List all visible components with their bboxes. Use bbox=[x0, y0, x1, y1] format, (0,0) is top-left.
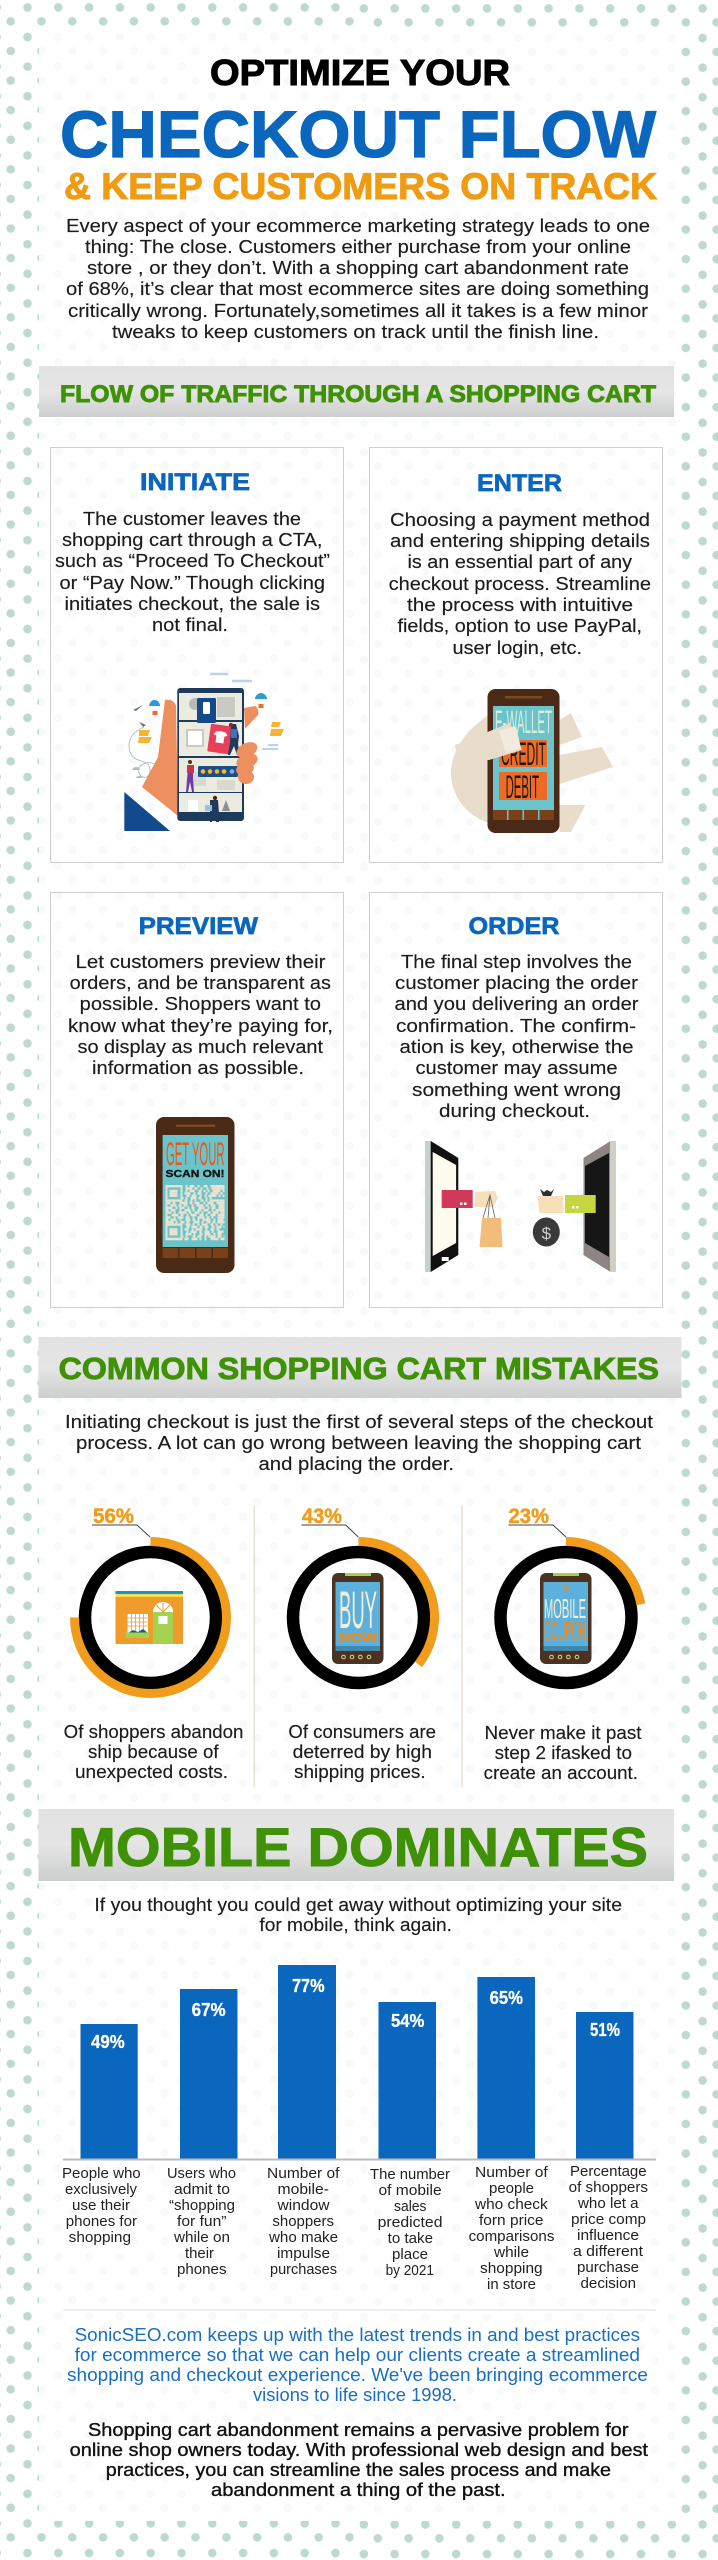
icon: hand holding e-wallet phone: DEBIT bbox=[506, 769, 539, 805]
number: 56%: 56% bbox=[93, 1505, 134, 1528]
text: order description: customer placing the order bbox=[395, 973, 638, 993]
title line: keep customers on track: & KEEP CUSTOMERS ON TRACK bbox=[64, 166, 657, 207]
text: caption 23 percent bbox=[484, 1723, 642, 1783]
chart label: column 1 bbox=[62, 2165, 141, 2246]
chart label: column 2: their bbox=[185, 2245, 214, 2262]
icon: hand holding e-wallet phone bbox=[451, 689, 613, 833]
chart label: column 3: who make bbox=[268, 2229, 338, 2246]
chart label: column 5: while bbox=[493, 2244, 529, 2261]
text: caption 23 percent: Never make it past bbox=[484, 1723, 642, 1743]
chart label: column 6: Percentage bbox=[570, 2163, 647, 2180]
text: closing paragraph: online shop owners today. With professional web design and best bbox=[70, 2440, 648, 2460]
text: order description: and you delivering an order bbox=[394, 994, 638, 1014]
text: order description: confirmation. The confirm- bbox=[396, 1016, 636, 1036]
panel: preview: GET YOUR bbox=[166, 1136, 224, 1172]
chart label: column 4 bbox=[370, 2166, 450, 2279]
text: initiate description: not final. bbox=[152, 615, 228, 635]
chart label: column 3 bbox=[267, 2165, 340, 2278]
number: 43%: 43% bbox=[302, 1505, 342, 1528]
icon: hand holding shopping phone bbox=[124, 674, 284, 831]
text: closing paragraph bbox=[70, 2420, 648, 2500]
chart label: column 6: price comp bbox=[571, 2211, 646, 2228]
text: closing paragraph: practices, you can streamline the sales process and make bbox=[106, 2460, 611, 2480]
chart label: column 5 bbox=[469, 2164, 554, 2293]
chart label: column 1: shopping bbox=[69, 2229, 131, 2246]
text: closing paragraph: Shopping cart abandonment remains a pervasive problem for bbox=[88, 2420, 629, 2440]
stat: 56 percent unexpected costs bbox=[74, 1505, 226, 1694]
text: order description bbox=[394, 952, 638, 1121]
chart label: column 5: comparisons bbox=[469, 2228, 554, 2245]
stat: 43 percent shipping prices: BUY bbox=[339, 1581, 377, 1640]
icon: hand holding e-wallet phone: CREDIT bbox=[501, 736, 546, 772]
intro paragraph: critically wrong. Fortunately,sometimes all it takes is a few minor bbox=[68, 301, 648, 321]
chart label: column 2: for fun” bbox=[177, 2213, 226, 2230]
text: enter description: user login, etc. bbox=[452, 638, 582, 658]
chart label: column 4: to take bbox=[388, 2230, 433, 2247]
label: dollar sign: $ bbox=[562, 1583, 569, 1595]
text: enter description bbox=[389, 510, 651, 658]
text: preview description: so display as much relevant bbox=[78, 1037, 323, 1057]
icon glyph: dollar sign: $ bbox=[542, 1224, 552, 1243]
bar: 65% bbox=[477, 1977, 535, 2159]
text: enter description: Choosing a payment method bbox=[390, 510, 650, 530]
text: preview description: Let customers preview their bbox=[76, 952, 326, 972]
chart label: column 6: purchase bbox=[577, 2259, 639, 2276]
chart label: column 6: who let a bbox=[577, 2195, 639, 2212]
text: initiate description: or “Pay Now.” Though clicking bbox=[60, 573, 325, 593]
chart label: column 6 bbox=[569, 2163, 648, 2292]
stat: 23 percent create an account: COUPON bbox=[544, 1615, 586, 1646]
section banner: common shopping cart mistakes bbox=[38, 1337, 681, 1398]
text: enter description: is an essential part of any bbox=[408, 552, 632, 572]
icon: phone with qr code bbox=[156, 1117, 234, 1273]
text: caption 56 percent bbox=[64, 1722, 243, 1782]
chart label: column 3: shoppers bbox=[272, 2213, 334, 2230]
chart label: column 4: predicted bbox=[378, 2214, 442, 2231]
title line: checkout flow: CHECKOUT FLOW bbox=[60, 98, 656, 171]
text: preview description: possible. Shoppers want to bbox=[80, 994, 321, 1014]
bar: 77%: 77% bbox=[292, 1976, 325, 1996]
bar: 77% bbox=[278, 1965, 336, 2159]
chart label: column 2: while on bbox=[173, 2229, 230, 2246]
icon: buy now phone bbox=[332, 1573, 384, 1664]
bar: 67% bbox=[180, 1989, 238, 2159]
chart label: column 6: of shoppers bbox=[569, 2179, 648, 2196]
text: caption 43 percent bbox=[288, 1722, 436, 1782]
chart label: column 1: use their bbox=[72, 2197, 130, 2214]
chart label: column 5: forn price bbox=[479, 2212, 544, 2229]
text: sonicseo blurb: for ecommerce so that we can help our clients create a streamlined bbox=[75, 2345, 640, 2365]
chart label: column 5: shopping bbox=[480, 2260, 543, 2277]
text: initiate description: The customer leaves the bbox=[83, 509, 301, 529]
bar: 49%: 49% bbox=[91, 2032, 125, 2052]
title line: optimize your: OPTIMIZE YOUR bbox=[210, 52, 510, 93]
text: sonicseo blurb: visions to life since 1998. bbox=[253, 2385, 457, 2405]
chart label: column 2: Users who bbox=[167, 2165, 236, 2182]
text: enter description: fields, option to use PayPal, bbox=[398, 616, 642, 636]
text: preview description: orders, and be transparent as bbox=[70, 973, 331, 993]
chart label: column 4: The number bbox=[370, 2166, 450, 2183]
text: order description: The final step involves the bbox=[401, 952, 632, 972]
text: preview description: know what they’re paying for, bbox=[68, 1016, 333, 1036]
stat: 23 percent create an account: MOBILE bbox=[544, 1593, 586, 1624]
chart label: column 2: phones bbox=[177, 2261, 226, 2278]
section banner: flow of traffic: FLOW OF TRAFFIC THROUGH A SHOPPING CART bbox=[60, 381, 656, 408]
title bbox=[60, 52, 657, 207]
heading: initiate: INITIATE bbox=[140, 469, 250, 496]
chart label: column 3: Number of bbox=[267, 2165, 340, 2182]
chart label: column 3: purchases bbox=[270, 2261, 337, 2278]
heading: preview: PREVIEW bbox=[139, 913, 258, 940]
label: now: NOW bbox=[339, 1632, 377, 1644]
text: mistakes intro bbox=[65, 1412, 653, 1474]
text: preview description bbox=[68, 952, 333, 1078]
stat: 43 percent shipping prices bbox=[293, 1505, 435, 1683]
bar: 51%: 51% bbox=[590, 2020, 620, 2040]
chart label: column 4: place bbox=[392, 2246, 428, 2263]
bar: 67%: 67% bbox=[192, 2000, 226, 2020]
text: caption 43 percent: shipping prices. bbox=[294, 1762, 426, 1782]
text: initiate description: shopping cart through a CTA, bbox=[62, 530, 322, 550]
chart label: column 1: exclusively bbox=[65, 2181, 137, 2198]
text: order description: ation is key, otherwise the bbox=[400, 1037, 634, 1057]
intro paragraph: thing: The close. Customers either purchase from your online bbox=[85, 237, 631, 257]
icon: mobile coupon phone bbox=[540, 1573, 592, 1664]
bar chart bbox=[63, 1965, 656, 2160]
text: mobile intro: for mobile, think again. bbox=[259, 1915, 452, 1935]
text: caption 56 percent: unexpected costs. bbox=[75, 1762, 228, 1782]
chart label: column 3: window bbox=[276, 2197, 330, 2214]
text: mistakes intro: and placing the order. bbox=[258, 1454, 454, 1474]
chart label: column 4: sales bbox=[394, 2198, 426, 2215]
section banner: flow of traffic bbox=[39, 366, 674, 417]
text: preview description: information as possible. bbox=[92, 1058, 304, 1078]
text: mistakes intro: Initiating checkout is just the first of several steps of the checkout bbox=[65, 1412, 653, 1432]
bar: 49% bbox=[80, 2024, 138, 2159]
text: order description: something went wrong bbox=[412, 1080, 621, 1100]
intro paragraph: tweaks to keep customers on track until the finish line. bbox=[112, 322, 599, 342]
number: 23%: 23% bbox=[508, 1505, 549, 1528]
text: initiate description: such as “Proceed To Checkout” bbox=[55, 551, 330, 571]
chart label: column 2 bbox=[167, 2165, 236, 2278]
chart label: column 3: impulse bbox=[277, 2245, 330, 2262]
text: sonicseo blurb: SonicSEO.com keeps up with the latest trends in and best practices bbox=[75, 2325, 640, 2345]
text: caption 43 percent: deterred by high bbox=[293, 1742, 432, 1762]
chart label: column 1: phones for bbox=[66, 2213, 137, 2230]
chart label: column 6: a different bbox=[573, 2243, 644, 2260]
text: caption 43 percent: Of consumers are bbox=[288, 1722, 436, 1742]
heading: order: ORDER bbox=[468, 913, 560, 940]
text: mistakes intro: process. A lot can go wrong between leaving the shopping cart bbox=[76, 1433, 641, 1453]
chart label: column 2: admit to bbox=[174, 2181, 230, 2198]
chart label: column 6: decision bbox=[580, 2275, 636, 2292]
text: sonicseo blurb bbox=[67, 2325, 648, 2405]
text: caption 56 percent: ship because of bbox=[88, 1742, 220, 1762]
chart label: column 5: in store bbox=[487, 2276, 536, 2293]
text: enter description: the process with intuitive bbox=[407, 595, 633, 615]
intro paragraph: of 68%, it’s clear that most ecommerce sites are doing something bbox=[66, 279, 649, 299]
text: mobile intro bbox=[94, 1895, 622, 1935]
panel: preview bbox=[50, 892, 344, 1308]
section banner: mobile dominates: MOBILE DOMINATES bbox=[68, 1817, 648, 1878]
bar: 51% bbox=[576, 2012, 634, 2159]
text: closing paragraph: abandonment a thing of the past. bbox=[211, 2480, 506, 2500]
chart label: column 3: mobile- bbox=[278, 2181, 329, 2198]
stat: 23 percent create an account bbox=[500, 1505, 641, 1683]
panel: order bbox=[370, 892, 662, 1308]
intro paragraph: store , or they don’t. With a shopping cart abandonment rate bbox=[87, 258, 629, 278]
chart label: column 5: Number of bbox=[475, 2164, 549, 2181]
text: sonicseo blurb: shopping and checkout experience. We've been bringing ecommerce bbox=[67, 2365, 648, 2385]
bar: 65%: 65% bbox=[490, 1988, 523, 2008]
chart label: column 4: by 2021 bbox=[386, 2262, 434, 2279]
text: enter description: checkout process. Streamline bbox=[389, 574, 651, 594]
bar: 54% bbox=[378, 2002, 436, 2159]
chart label: column 5: who check bbox=[474, 2196, 548, 2213]
text: initiate description bbox=[55, 509, 330, 635]
ring chart: 56% bbox=[74, 1542, 226, 1694]
heading: enter: ENTER bbox=[477, 470, 562, 497]
chart label: column 4: of mobile bbox=[378, 2182, 442, 2199]
intro paragraph: Every aspect of your ecommerce marketing strategy leads to one bbox=[66, 216, 650, 236]
chart label: column 1: People who bbox=[62, 2165, 141, 2182]
ring chart: 23% bbox=[500, 1542, 641, 1683]
text: initiate description: initiates checkout, the sale is bbox=[64, 594, 320, 614]
section banner: common shopping cart mistakes: COMMON SHOPPING CART MISTAKES bbox=[59, 1351, 659, 1386]
text: enter description: and entering shipping details bbox=[390, 531, 650, 551]
chart label: column 6: influence bbox=[577, 2227, 639, 2244]
panel: enter bbox=[370, 448, 662, 862]
text: order description: customer may assume bbox=[416, 1058, 618, 1078]
text: mobile intro: If you thought you could get away without optimizing your site bbox=[94, 1895, 622, 1915]
bar: 54%: 54% bbox=[391, 2011, 424, 2031]
intro paragraph bbox=[66, 216, 650, 342]
icon: phones exchanging bag and money bbox=[425, 1141, 616, 1272]
panel: initiate bbox=[50, 448, 344, 862]
text: order description: during checkout. bbox=[439, 1101, 590, 1121]
text: caption 23 percent: step 2 ifasked to bbox=[495, 1743, 632, 1763]
icon: storefront bbox=[116, 1591, 183, 1644]
chart label: column 2: “shopping bbox=[169, 2197, 235, 2214]
icon: hand holding e-wallet phone: E-WALLET bbox=[495, 704, 552, 740]
chart label: column 5: people bbox=[489, 2180, 534, 2197]
label: scan on: SCAN ON! bbox=[166, 1168, 224, 1180]
text: caption 23 percent: create an account. bbox=[484, 1763, 638, 1783]
ring chart: 43% bbox=[293, 1541, 435, 1683]
text: caption 56 percent: Of shoppers abandon bbox=[64, 1722, 243, 1742]
